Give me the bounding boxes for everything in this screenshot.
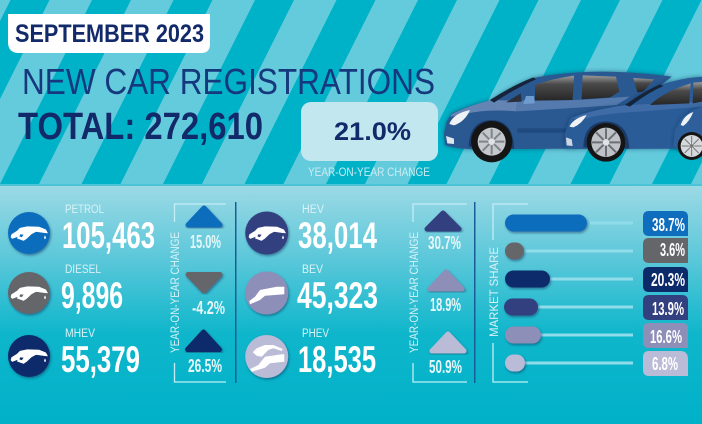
bev stat: 45,323 [297,275,378,316]
cars illustration [444,72,702,162]
year-on-year column two: YEAR-ON-YEAR CHANGE [409,232,421,353]
phev change [429,334,464,377]
mhev share bar [505,267,688,292]
petrol stat: 105,463 [62,215,155,256]
hev share bar: 13.9% [652,299,684,319]
diesel share bar: 3.6% [660,240,685,260]
mhev change [188,332,222,376]
total: TOTAL: 272,610 [18,106,263,148]
petrol change: 15.0% [190,232,221,252]
diesel stat [8,264,123,316]
lower panel background [0,186,702,424]
divider [474,202,476,383]
car: hatchback [565,77,702,162]
mhev stat: MHEV [65,328,95,340]
year-on-year headline box: YEAR-ON-YEAR CHANGE [308,165,430,179]
fuel column two [245,204,378,380]
petrol stat: PETROL [65,204,105,216]
mhev change: 26.5% [188,356,222,376]
phev stat: PHEV [302,328,329,340]
title: NEW CAR REGISTRATIONS [22,61,435,102]
fuel column one [8,204,155,380]
phev stat: 18,535 [298,339,376,380]
hev change [427,213,461,253]
market share chart [487,204,688,382]
diesel share bar [505,238,688,263]
hev stat: 38,014 [298,215,377,256]
date badge: SEPTEMBER 2023 [15,20,204,48]
hev change: 30.7% [428,233,461,253]
bev change: 18.9% [430,295,461,315]
phev share bar [505,351,688,376]
hev share bar [504,295,688,320]
diesel change: -4.2% [192,298,225,318]
year-on-year headline box [301,102,438,179]
car: small city car [673,107,702,160]
mhev stat: 55,379 [61,339,140,380]
year-on-year headline box: 21.0% [334,118,411,146]
bev share bar: 16.6% [650,327,682,347]
diesel stat: 9,896 [61,275,123,316]
mhev stat [8,328,140,380]
phev share bar: 6.8% [652,354,678,374]
year-on-year column one: YEAR-ON-YEAR CHANGE [170,232,182,353]
diesel change [188,274,225,318]
car: people carrier [444,72,672,162]
market share chart: MARKET SHARE [487,247,501,337]
phev change: 50.9% [429,357,462,377]
petrol share bar: 38.7% [652,215,685,235]
bev stat [245,264,378,316]
hev stat: HEV [302,204,324,216]
phev stat [245,328,376,380]
icon: ev plug [249,287,284,304]
diesel stat: DIESEL [65,264,102,276]
petrol share bar [505,211,688,236]
divider [235,202,236,383]
bev share bar [505,323,688,348]
year-on-year column two [409,204,467,382]
bev stat: BEV [302,264,323,276]
hev stat [245,204,377,256]
icon: nozzle and plug [250,345,284,372]
petrol change [188,208,221,252]
date badge [8,14,210,53]
mhev share bar: 20.3% [651,270,685,290]
bev change [430,272,462,315]
petrol stat [8,204,155,256]
header background stripes [0,0,702,186]
year-on-year column one [170,204,226,382]
